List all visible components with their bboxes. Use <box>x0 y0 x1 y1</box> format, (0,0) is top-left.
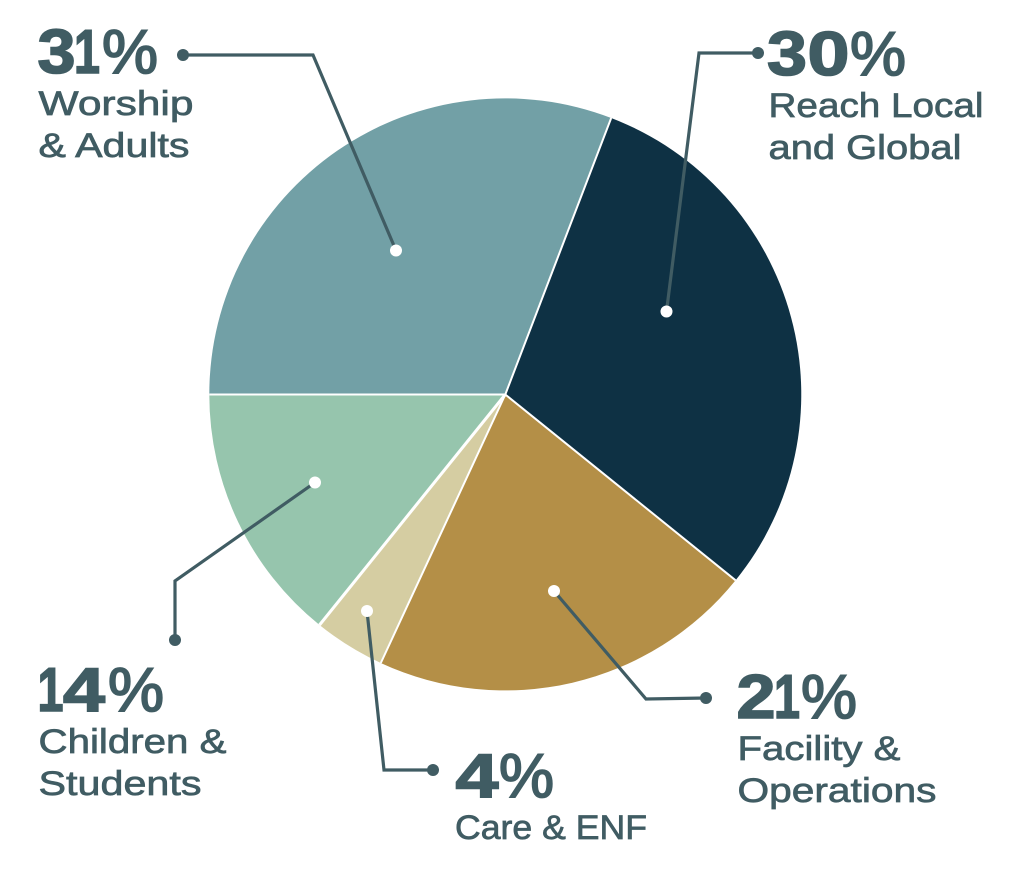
label: 14% Children & Students: 4 <box>63 656 106 725</box>
label: 21% Facility & Operations: Operations <box>738 772 936 810</box>
label: 21% Facility & Operations: 2 <box>736 663 776 732</box>
leader: Worship & Adults <box>177 49 402 256</box>
label: 21% Facility & Operations <box>736 663 936 810</box>
label: 21% Facility & Operations: 1 <box>774 663 800 732</box>
leader: Facility & Operations <box>548 585 712 704</box>
label: 31% Worship & Adults <box>38 18 194 165</box>
label: 14% Children & Students <box>38 656 227 803</box>
pie chart <box>209 98 801 690</box>
label: 4% Care & ENF: 4 <box>456 742 499 811</box>
label: 4% Care & ENF <box>455 742 647 847</box>
label: 31% Worship & Adults: 3 <box>38 18 76 87</box>
label: 14% Children & Students: Children & <box>38 723 227 761</box>
slice dividers <box>209 118 736 663</box>
label: 30% Reach Local and Global: and Global <box>768 129 962 167</box>
label: 14% Children & Students: 1 <box>38 656 64 725</box>
label: 31% Worship & Adults: 1 <box>74 18 100 87</box>
leader: Children & Students <box>169 476 321 646</box>
slice: Children & Students 14% <box>209 394 505 625</box>
label: 4% Care & ENF: % <box>499 742 554 811</box>
label: 30% Reach Local and Global: 0 <box>808 20 850 89</box>
label: 4% Care & ENF: Care & ENF <box>455 809 647 847</box>
leader: Care & ENF <box>361 605 439 776</box>
leader: Reach Local and Global <box>660 47 764 318</box>
label: 31% Worship & Adults: % <box>102 18 158 87</box>
label: 14% Children & Students: Students <box>38 765 202 803</box>
slice: Care & ENF 4% <box>320 394 505 663</box>
label: 14% Children & Students: % <box>108 656 164 725</box>
label: 31% Worship & Adults: Worship <box>38 85 194 123</box>
slice: Worship & Adults 31% <box>209 98 611 395</box>
label: 31% Worship & Adults: & Adults <box>38 127 190 165</box>
label: 21% Facility & Operations: % <box>801 663 857 732</box>
label: 21% Facility & Operations: Facility & <box>738 730 901 768</box>
label: 30% Reach Local and Global: Reach Local <box>768 87 984 125</box>
label: 30% Reach Local and Global <box>767 20 984 167</box>
slice: Reach Local and Global 30% <box>505 118 801 580</box>
label: 30% Reach Local and Global: % <box>850 20 906 89</box>
label: 30% Reach Local and Global: 3 <box>767 20 807 89</box>
slice: Facility & Operations 21% <box>381 394 736 690</box>
